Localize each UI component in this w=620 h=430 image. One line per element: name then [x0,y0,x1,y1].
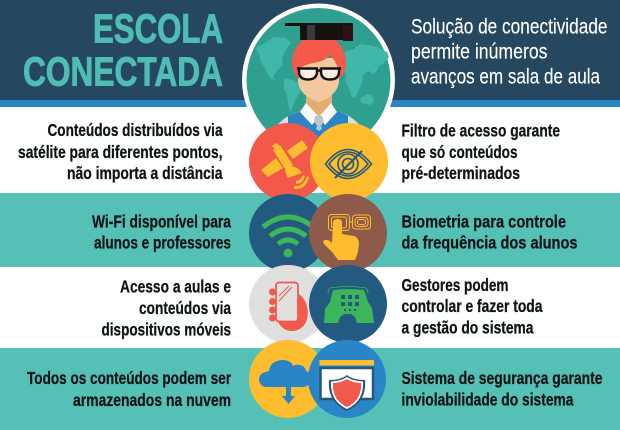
title: ESCOLA [93,6,223,52]
icon: phone in hand [249,265,327,343]
face [298,58,339,102]
text: satellite: não importa a distância [67,163,223,183]
shoulders and vest [272,111,365,157]
collar and tie [300,103,337,125]
title: CONECTADA [23,48,223,94]
text: filter: que só conteúdos [402,142,518,162]
text: cloud: armazenados na nuvem [73,390,231,410]
text: satellite: satélite para diferentes pontos, [18,142,222,162]
neck [306,90,332,122]
title [23,6,223,94]
header subtitle [411,16,608,88]
icon: wi-fi [249,194,327,272]
row bands [0,107,620,430]
text: managers: controlar e fazer toda [402,296,543,316]
text: security [402,368,603,410]
text: biometrics: da frequência dos alunos [402,232,578,252]
text: managers [402,275,543,338]
icon: eye filter [310,123,388,201]
hair [292,38,346,79]
text: cloud: Todos os conteúdos podem ser [27,368,231,388]
text: satellite: Conteúdos distribuídos via [48,120,223,140]
icon: biometrics [309,194,387,272]
avatar: student with graduation cap over world map [242,4,395,160]
world map [256,37,389,112]
text: filter [402,120,560,183]
text: managers: a gestão do sistema [402,318,534,338]
text: mobile: Acesso a aulas e [120,276,231,296]
icon: cloud download [249,340,327,418]
text: filter: pré-determinados [402,163,520,183]
text: mobile: conteúdos via [139,298,231,318]
text: cloud [27,368,231,410]
text: biometrics [402,212,578,252]
text: wi-fi: alunos e professores [94,232,231,252]
text: wi-fi: Wi-Fi disponível para [92,212,231,232]
icon: security shield [308,340,386,418]
text: filter: Filtro de acesso garante [402,120,560,140]
glasses [297,68,341,80]
text: satellite [18,120,223,183]
text: biometrics: Biometria para controle [402,212,566,232]
icon: satellite [249,123,327,201]
left texts [18,120,231,410]
text: managers: Gestores podem [402,275,508,295]
header band [0,0,620,107]
right texts [402,120,603,410]
text: wi-fi [92,212,231,252]
text: mobile [102,276,231,340]
graduation cap [285,23,353,41]
header subtitle: permite inúmeros [411,40,548,64]
icon: tablet with hands [309,265,387,343]
text: security: inviolabilidade do sistema [402,390,574,410]
text: mobile: dispositivos móveis [102,320,231,340]
